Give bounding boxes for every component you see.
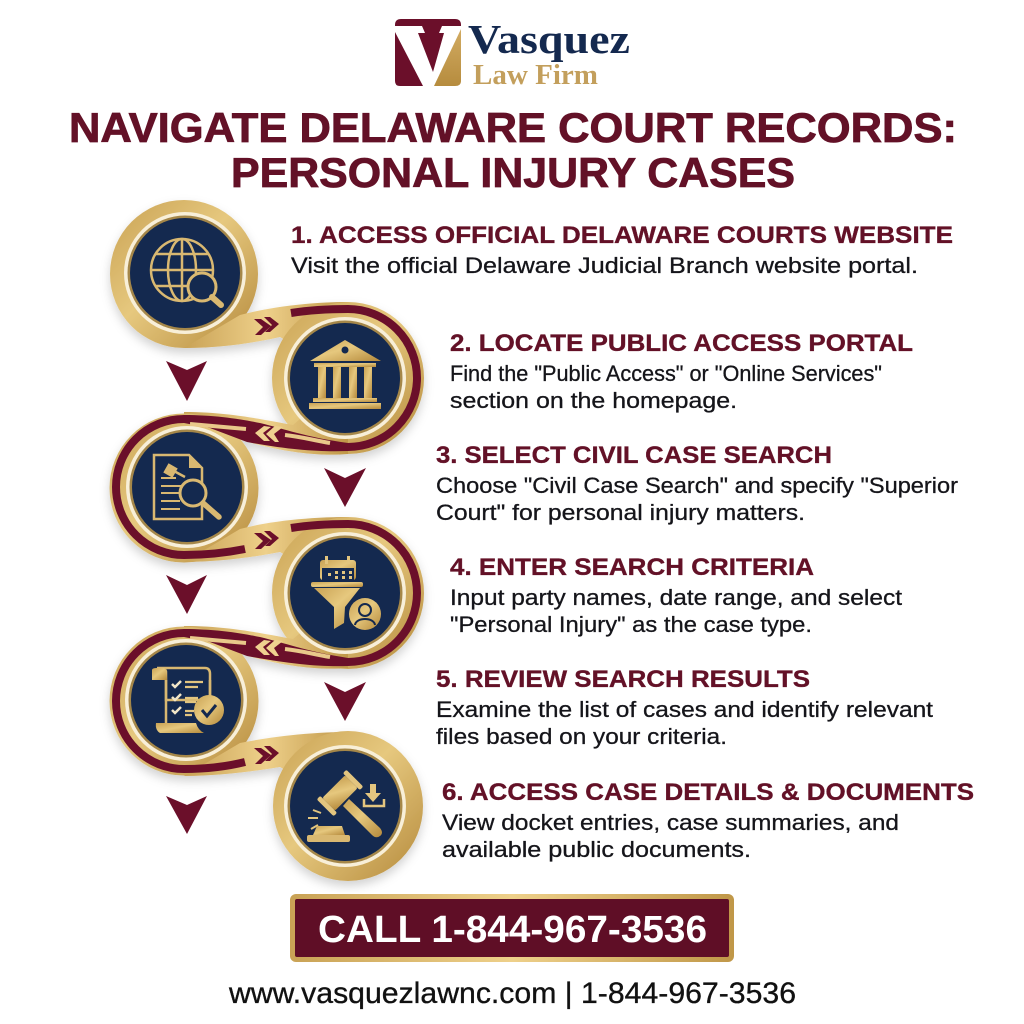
call button: CALL 1-844-967-3536 [318,909,707,951]
logo [395,16,630,91]
step 2 text [450,330,913,413]
step 2 text: 2. LOCATE PUBLIC ACCESS PORTAL [450,330,913,357]
logo mark [395,19,461,86]
step 5 text [436,666,934,749]
logo subtitle: Law Firm [473,59,598,91]
medallion 2 base [284,317,406,439]
step 3 text: Choose "Civil Case Search" and specify "Superior [436,473,959,498]
medallion 3 base [126,426,248,548]
icon: courthouse [309,340,381,409]
title [69,104,957,196]
step 6 text [442,779,974,862]
medallion 5 base [125,639,247,761]
icon: document with gavel and magnifier [154,455,219,519]
inlay: step 4 to 5 [184,629,348,666]
step 3 text: 3. SELECT CIVIL CASE SEARCH [436,442,832,469]
icon: globe with magnifier [151,239,221,305]
chevrons: step 3 to 4 [254,531,279,549]
flow arrows [166,361,366,834]
maroon band: step 4 to 5 [116,524,417,769]
step 2 text: Find the "Public Access" or "Online Services" [450,361,882,386]
step 5 text: files based on your criteria. [436,724,727,749]
footer contact line: www.vasquezlawnc.com | 1-844-967-3536 [228,977,796,1010]
maroon band: step 2 to 3 [116,309,417,555]
step 5 text: Examine the list of cases and identify relevant [436,697,934,722]
chevrons: step 5 to 6 [254,746,279,764]
title: PERSONAL INJURY CASES [231,149,795,196]
logo name: Vasquez [468,16,630,62]
step 1 text [291,222,953,278]
step 6 text: 6. ACCESS CASE DETAILS & DOCUMENTS [442,779,974,806]
medallion 6 base [284,745,406,867]
step 6 text: available public documents. [442,837,751,862]
title: NAVIGATE DELAWARE COURT RECORDS: [69,104,957,151]
step 1 text: 1. ACCESS OFFICIAL DELAWARE COURTS WEBSITE [291,222,953,249]
step 1 text: Visit the official Delaware Judicial Branch website portal. [291,253,918,278]
icon: checklist scroll [152,668,224,733]
icon: gavel with download [307,770,384,842]
call button [290,894,734,962]
step 3 text: Court" for personal injury matters. [436,500,805,525]
step 4 text: Input party names, date range, and select [450,585,903,610]
timeline ribbon [110,200,424,881]
medallion 1 base [124,212,246,334]
disc and connector shapes [110,200,424,881]
step 5 text: 5. REVIEW SEARCH RESULTS [436,666,810,693]
medallions [124,212,406,867]
medallion 4 base [284,532,406,654]
step 6 text: View docket entries, case summaries, and [442,810,899,835]
step 4 text: "Personal Injury" as the case type. [450,612,812,637]
step 4 text: 4. ENTER SEARCH CRITERIA [450,554,814,581]
step 2 text: section on the homepage. [450,388,737,413]
icon: calendar funnel with person [311,556,381,630]
chevrons: step 1 to 2 [254,317,279,335]
inlay: step 2 to 3 [184,415,348,451]
step 3 text [436,442,959,525]
step 4 text [450,554,903,637]
